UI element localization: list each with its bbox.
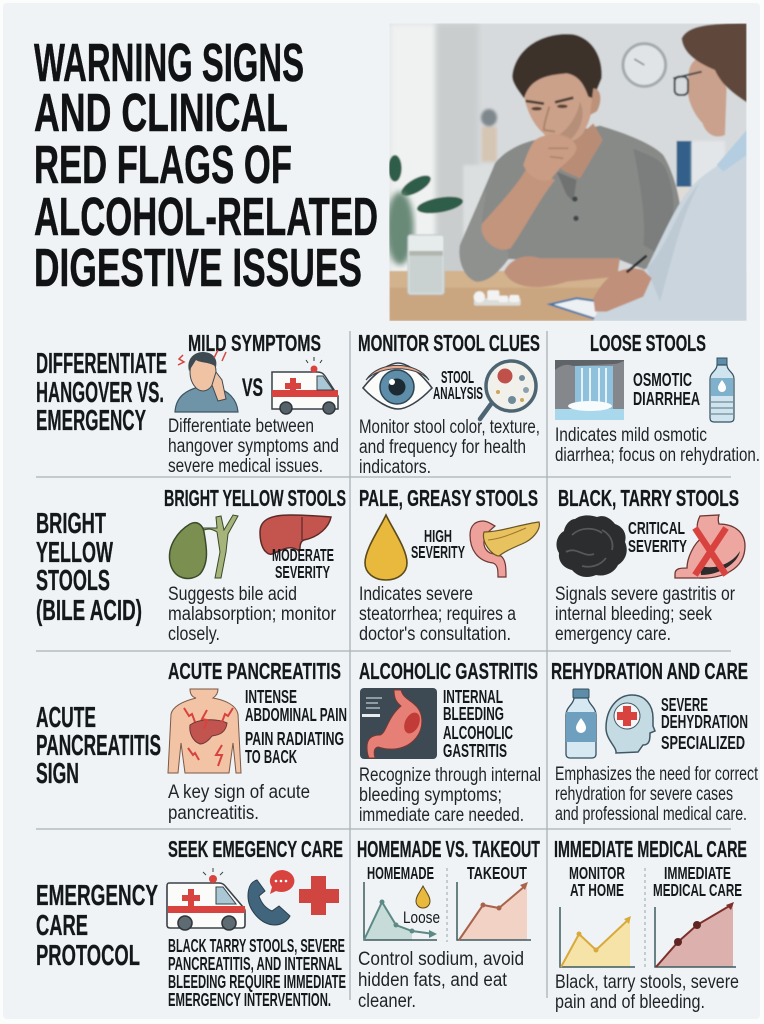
body: pale greasy: Indicates severe <box>359 584 473 605</box>
body: black tarry: emergency care. <box>555 624 671 645</box>
icon: eye <box>363 363 432 409</box>
body: differentiate: hangover symptoms and <box>168 436 339 457</box>
body: alcoholic gastritis: immediate care needed. <box>359 805 524 826</box>
label: moderate severity: SEVERITY <box>275 562 330 582</box>
body: pale greasy: steatorrhea; requires a <box>359 604 516 625</box>
body: black tarry stools severe pain <box>555 972 739 1013</box>
man: head <box>524 72 593 142</box>
heading: monitor stool clues: MONITOR STOOL CLUES <box>358 330 540 356</box>
body: acute pancreatitis <box>168 782 310 824</box>
body: control sodium <box>358 949 524 1012</box>
heading: alcoholic gastritis: ALCOHOLIC GASTRITIS <box>359 658 538 684</box>
body: monitor: and frequency for health <box>359 437 526 458</box>
vs label: VS <box>242 374 263 402</box>
icon: magnifier with microbes <box>480 361 536 419</box>
man: hand <box>523 134 577 181</box>
label: critical severity: CRITICAL <box>628 518 685 538</box>
photo: worried man consulting a doctor <box>386 23 747 321</box>
panel: row 1 differentiate hangover vs emergency <box>36 330 760 478</box>
body: pale greasy: doctor's consultation. <box>359 624 511 645</box>
heading: acute pancreatitis: ACUTE PANCREATITIS <box>168 658 341 684</box>
body: differentiate <box>168 416 339 477</box>
chart: homemade: HOMEMADE <box>367 863 434 883</box>
heading: homemade vs takeout: HOMEMADE VS. TAKEOUT <box>357 836 540 862</box>
body: acute pancreatitis: A key sign of acute <box>168 782 310 803</box>
title: WARNING SIGNS <box>34 33 304 93</box>
title <box>34 33 378 298</box>
body: loose: Indicates mild osmotic <box>555 425 707 446</box>
pills <box>474 290 521 306</box>
row heading: bright yellow stools: STOOLS <box>36 565 110 597</box>
chart: takeout <box>457 863 531 940</box>
label: abdominal pain: PAIN RADIATING <box>245 729 344 749</box>
row heading: acute pancreatitis sign: SIGN <box>36 758 79 790</box>
label: critical severity <box>628 518 687 556</box>
label: internal bleeding alcoholic gastritis: ALCOHOLIC <box>443 723 513 743</box>
row heading: bright yellow stools: BRIGHT <box>36 508 106 540</box>
icon: phone <box>248 880 290 925</box>
icon: ambulance <box>272 357 338 414</box>
label: internal bleeding alcoholic gastritis: BLEEDING <box>443 704 504 724</box>
body: alcoholic gastritis: Recognize through internal <box>359 765 541 786</box>
icon: yellow drop <box>365 515 407 580</box>
clipboard <box>550 298 600 318</box>
row heading: differentiate hangover <box>36 348 167 437</box>
body: monitor: indicators. <box>359 457 431 478</box>
heading: pale greasy stools: PALE, GREASY STOOLS <box>359 485 538 511</box>
body: bright yellow: malabsorption; monitor <box>168 604 337 625</box>
label: stool analysis <box>433 367 483 403</box>
body: loose <box>555 425 760 466</box>
body: pale greasy <box>359 584 516 645</box>
label: osmotic diarrhea: DIARRHEA <box>633 389 700 409</box>
row heading: emergency care protocol: EMERGENCY <box>36 880 158 912</box>
chart: monitor at home <box>560 863 635 967</box>
icon: ambulance <box>167 868 245 930</box>
title: RED FLAGS OF <box>34 135 292 195</box>
label: abdominal pain: INTENSE <box>245 687 297 707</box>
table <box>389 286 600 321</box>
plant <box>386 155 464 265</box>
title: DIGESTIVE ISSUES <box>34 238 362 298</box>
body: control sodium: cleaner. <box>358 991 416 1012</box>
label: severe dehydration specialized <box>661 695 748 753</box>
row heading: emergency care protocol <box>36 880 158 972</box>
row heading: bright yellow stools: (BILE ACID) <box>36 595 142 627</box>
body: black tarry stools severe pain: pain and of bleeding. <box>555 992 705 1013</box>
label: internal bleeding alcoholic gastritis <box>443 687 513 761</box>
row heading: differentiate hangover: EMERGENCY <box>36 405 146 437</box>
chart: takeout: TAKEOUT <box>467 863 527 883</box>
body: bright yellow: closely. <box>168 624 220 645</box>
chart: immediate medical care: IMMEDIATE <box>664 863 731 883</box>
icon: gallbladder <box>170 515 238 578</box>
title: AND CLINICAL <box>34 83 288 143</box>
man: lower hand <box>504 256 620 287</box>
label: abdominal pain: ABDOMINAL PAIN <box>245 705 347 725</box>
label: stool analysis: ANALYSIS <box>433 383 483 403</box>
icon: waterfall <box>555 360 624 420</box>
panel: row 3 acute pancreatitis <box>36 658 759 826</box>
panel: row 2 bright yellow stools <box>36 485 745 645</box>
chart: homemade: Loose <box>403 909 440 927</box>
row heading: acute pancreatitis sign: ACUTE <box>36 702 96 734</box>
chart: immediate medical care <box>653 863 742 967</box>
man: shirt and sleeves <box>466 125 680 270</box>
body: emergency intervention: EMERGENCY INTERVENTION. <box>168 990 331 1010</box>
body: acute pancreatitis: pancreatitis. <box>168 803 259 824</box>
icon: water bottle <box>710 358 734 422</box>
row heading: acute pancreatitis sign <box>36 702 161 790</box>
chart: homemade <box>364 863 440 940</box>
label: high severity: HIGH <box>424 526 452 546</box>
body: monitor <box>359 417 540 478</box>
grid lines <box>36 331 731 1000</box>
body: alcoholic gastritis: bleeding symptoms; <box>359 785 502 806</box>
icon: head with medical cross <box>606 695 655 753</box>
icon: stomach with red x <box>675 515 745 578</box>
icon: black tarry stool blob <box>557 515 627 577</box>
body: bright yellow: Suggests bile acid <box>168 584 297 605</box>
body: control sodium: Control sodium, avoid <box>358 949 524 970</box>
title: ALCOHOL-RELATED <box>34 187 378 247</box>
icon: stomach on monitor <box>360 688 437 759</box>
label: abdominal pain <box>245 687 347 767</box>
glass of water <box>408 235 444 294</box>
panel: row 4 emergency care protocol <box>36 836 747 1013</box>
body: emergency intervention <box>168 936 346 1010</box>
row heading: differentiate hangover: HANGOVER VS. <box>36 377 164 409</box>
label: internal bleeding alcoholic gastritis: GASTRITIS <box>443 741 507 761</box>
row heading: emergency care protocol: CARE <box>36 910 88 942</box>
label: high severity <box>411 526 465 562</box>
label: moderate severity: MODERATE <box>272 545 334 565</box>
icon: speech bubble <box>270 870 294 894</box>
heading: seek emegency care: SEEK EMEGENCY CARE <box>168 836 343 862</box>
label: moderate severity <box>272 545 334 582</box>
body: differentiate: Differentiate between <box>168 416 314 437</box>
chart: monitor at home: AT HOME <box>570 880 624 900</box>
label: stool analysis: STOOL <box>441 367 474 387</box>
icon: red cross <box>299 876 339 915</box>
body: emergency intervention: BLACK TARRY STOOLS, SEVERE <box>168 936 345 956</box>
body: emergency intervention: PANCREATITIS, AND INTERNAL <box>168 954 342 974</box>
row heading: emergency care protocol: PROTOCOL <box>36 940 140 972</box>
body: black tarry <box>555 584 736 645</box>
body: bright yellow <box>168 584 337 645</box>
icon: water bottle <box>566 689 596 758</box>
label: high severity: SEVERITY <box>411 542 465 562</box>
body: emergency intervention: BLEEDING REQUIRE IMMEDIATE <box>168 972 346 992</box>
label: severe dehydration specialized: SEVERE <box>661 695 708 715</box>
body: black tarry: internal bleeding; seek <box>555 604 712 625</box>
row heading: acute pancreatitis sign: PANCREATITIS <box>36 730 161 762</box>
label: osmotic diarrhea <box>633 370 700 409</box>
heading: mild symptoms: MILD SYMPTOMS <box>188 330 321 356</box>
label: internal bleeding alcoholic gastritis: INTERNAL <box>443 687 503 707</box>
icon: torso with pain <box>168 689 241 773</box>
label: abdominal pain: TO BACK <box>245 747 297 767</box>
body: monitor: Monitor stool color, texture, <box>359 417 540 438</box>
icon: man with headache <box>175 350 238 412</box>
row heading: bright yellow stools: YELLOW <box>36 537 113 569</box>
icon: liver <box>260 515 331 554</box>
body: control sodium: hidden fats, and eat <box>358 970 508 991</box>
heading: bright yellow stools: BRIGHT YELLOW STOOLS <box>164 485 346 511</box>
man: forearm <box>482 165 555 250</box>
chart: monitor at home: MONITOR <box>569 863 625 883</box>
row heading: differentiate hangover: DIFFERENTIATE <box>36 348 167 380</box>
man: neck and placket <box>558 123 603 178</box>
label: critical severity: SEVERITY <box>628 536 687 556</box>
body: rehydration <box>555 764 759 825</box>
label: osmotic diarrhea: OSMOTIC <box>633 370 692 390</box>
icon: pancreas <box>470 521 539 577</box>
body: alcoholic gastritis <box>359 765 541 826</box>
doctor <box>593 142 747 321</box>
body: differentiate: severe medical issues. <box>168 456 323 477</box>
row heading: bright yellow stools <box>36 508 142 627</box>
